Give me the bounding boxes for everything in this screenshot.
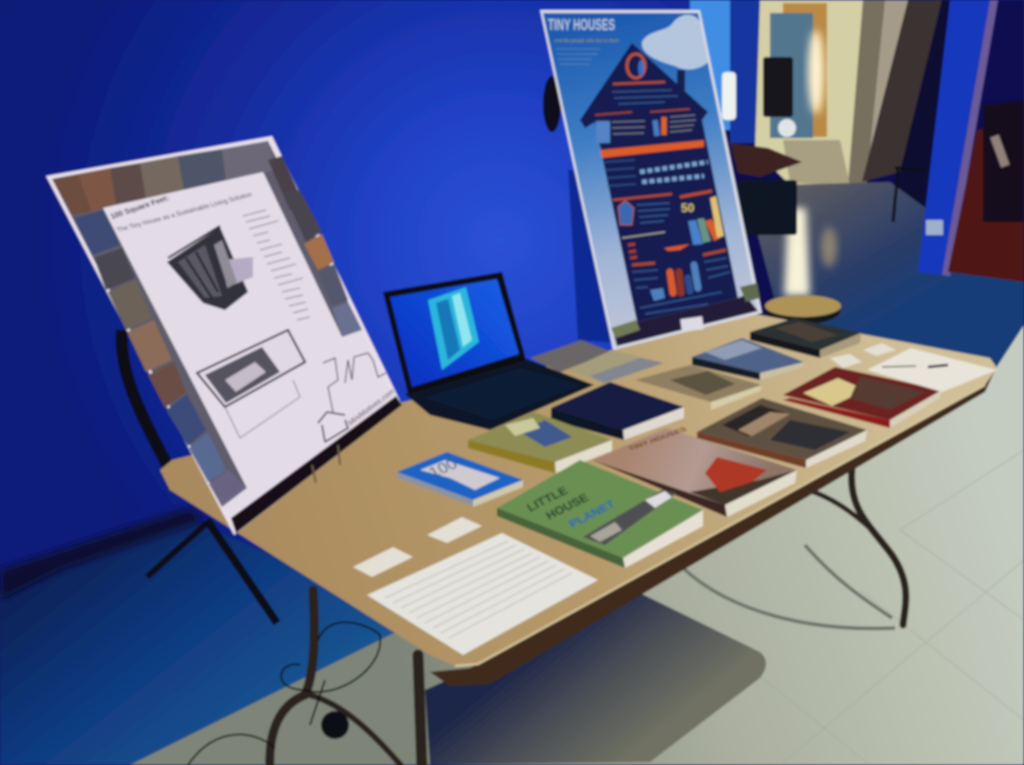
text lines [612,115,696,134]
mid lines [637,203,670,223]
stool by the column [893,168,925,222]
column sign [926,220,943,235]
window icon [596,121,610,143]
book: dark navy hardcover [551,382,684,440]
white lamp [722,72,736,120]
right brace [808,490,872,530]
white round object [778,119,796,137]
cream corridor wall [755,0,866,185]
sign-up sheet [367,533,598,655]
floor plan drawing [197,330,305,438]
poster subheading: The Tiny House as a Sustainable Living Solution [116,191,254,234]
book: 100 blue cover [397,452,523,507]
left stat lines [605,160,636,186]
hammock icon [664,244,690,251]
slanted corridor column [848,0,908,185]
white paper with pen [867,348,997,392]
light blue wall sliver [690,0,732,130]
blue box [650,288,665,301]
brown bench [730,143,802,177]
window image on screen [428,287,479,370]
skyline outline [323,353,386,412]
book: red barn cover [592,426,797,517]
lower brace [310,695,405,765]
centre front leg [418,655,422,765]
roof lines [612,90,678,104]
small white cards [830,343,896,368]
house silhouette [580,43,738,322]
logo circle [627,54,645,78]
footer logo [680,316,704,332]
black cabinet [763,57,793,117]
leg shadow curves on floor [683,545,895,628]
poster board [46,136,402,535]
book: Little House on a Small Planet [497,460,703,568]
orange banner [600,140,704,158]
table shadow on floor [425,593,766,765]
book number: 100 [426,456,461,481]
laptop base [405,358,594,430]
small headings [595,109,690,115]
grass tufts [611,283,760,338]
poster website: MiniMotives.com [347,386,396,428]
book title: TINY HOUSES [627,426,688,452]
black box [738,180,797,235]
red cabinet [948,120,1024,282]
keyboard [425,368,582,420]
book: blue and white cover [692,338,804,380]
people grid [640,162,708,182]
right leg [852,468,906,625]
book: red cover [783,367,942,428]
book title [524,484,618,530]
book title: PLANET [567,498,618,530]
chimney [677,70,685,96]
human figures [670,265,698,293]
poster board [540,10,762,350]
house logo [318,412,348,442]
left floor [0,512,460,765]
right pale floor [130,325,1024,765]
poster heading: 100 Square Feet: [109,193,171,221]
lower lines [632,258,730,314]
black speaker [543,76,561,132]
folding chair [122,330,277,623]
blue door [770,13,813,138]
hallway background [690,0,1024,390]
red headings [632,250,726,265]
poster title: TINY HOUSES [548,16,615,34]
left poster [46,136,402,535]
laptop [383,272,594,430]
black footer strip [231,396,402,533]
intro lines [556,49,600,64]
floor tile lines [740,450,1024,765]
bar chart [688,196,724,245]
table front rim highlight [455,385,985,666]
power cables [188,622,380,765]
business cards [353,517,482,577]
blue column [918,0,990,275]
blue wall [0,0,770,620]
book: black cover top [750,318,861,358]
mid heading [613,194,672,200]
wall shadow behind right poster [568,170,640,345]
laptop lid [383,272,526,394]
book title: HOUSE [543,491,591,522]
poster white panel [103,172,393,515]
people icons [655,120,657,136]
door glare [808,30,824,114]
dark blue pillar [730,0,762,143]
power adapter [321,711,349,739]
left front leg [270,590,314,765]
book: Backyard [468,412,612,473]
number 50: 50 [681,201,695,215]
cover collage strip [583,490,677,545]
table side edge [430,366,997,686]
poster stand clips [312,445,340,483]
poster subtitle: And the people who live in them [553,38,619,43]
book: dark collage cover [697,398,867,468]
roof heading [613,82,665,84]
tax heading [622,232,665,238]
bullet list [243,210,310,320]
book title: LITTLE [524,484,570,514]
book: sepia cover [635,365,762,410]
stool [765,295,841,324]
dark ground strip [613,295,758,346]
house icon [618,200,634,225]
table top [160,314,997,666]
book stack at back [530,340,664,383]
floor reflection [784,208,810,296]
orange door frame [783,3,827,137]
wall base shadow [0,508,205,600]
right poster [540,10,762,350]
corridor floor [783,140,850,185]
table legs [270,468,906,765]
cloud [642,15,708,69]
laptop screen [390,279,519,387]
photo collage border [52,141,362,507]
secondary floor reflection [821,227,837,267]
house section drawing [167,226,253,310]
back floor [745,182,1024,390]
red stats [628,244,637,258]
